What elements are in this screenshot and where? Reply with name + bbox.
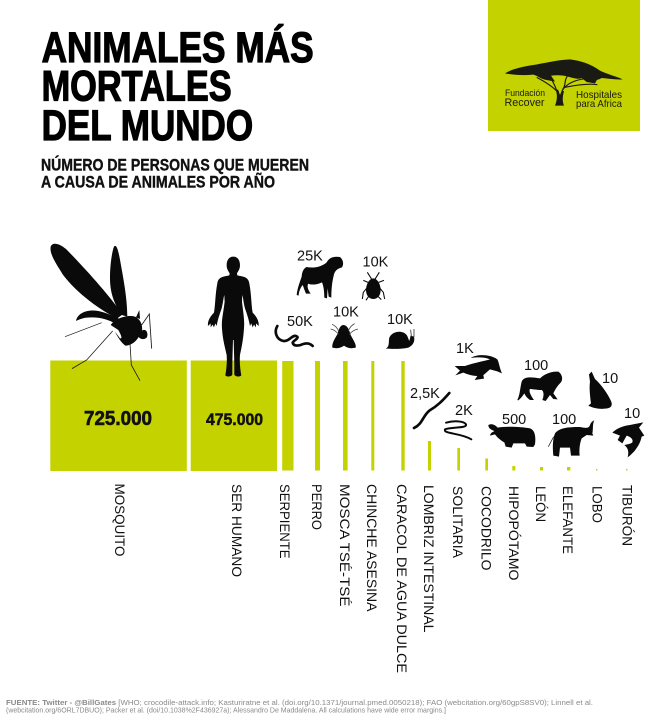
icon: snake [276, 326, 313, 346]
source footnote: FUENTE: Twitter - @BillGates [WHO; crocodile-attack.info; Kasturiratne et al. (doi.org/10.1371/journal.pmed.0050218); FAO (webcitation.org/60gpS8SV0); Linnell et al. [6, 699, 593, 707]
bar: mosquito [50, 360, 187, 471]
subtitle: NÚMERO DE PERSONAS QUE MUEREN [41, 156, 309, 174]
title: MORTALES [42, 63, 232, 111]
bar: chinche [371, 361, 374, 470]
category labels: HIPOPÓTAMO [506, 486, 521, 580]
icon: dog [297, 257, 343, 298]
icon: shark [612, 422, 644, 457]
icon: hippo [488, 424, 535, 448]
title: ANIMALES MÁS [42, 24, 314, 72]
category labels [112, 484, 635, 673]
category labels: COCODRILO [479, 486, 494, 570]
value labels: 100 [524, 358, 548, 374]
bar: lobo [596, 469, 598, 470]
icon: human silhouette [208, 257, 259, 376]
title: DEL MUNDO [42, 102, 253, 150]
value labels: 25K [297, 248, 323, 264]
logo text left: Recover [504, 97, 545, 109]
category labels: MOSQUITO [112, 484, 127, 556]
bar: tiburón [626, 469, 628, 470]
icon: mosquito [51, 244, 152, 381]
icon: acacia tree [505, 59, 623, 106]
category labels: LOBO [590, 486, 605, 523]
value labels: 2K [455, 403, 473, 419]
icon: crocodile [455, 355, 502, 380]
value labels: 50K [287, 314, 313, 330]
category labels: TIBURÓN [620, 485, 635, 546]
category labels: CHINCHE ASESINA [364, 484, 379, 612]
bar: elefante [567, 467, 570, 470]
value labels: 10 [624, 406, 640, 422]
icon: tapeworm [445, 421, 471, 439]
value labels: 10K [333, 304, 359, 320]
category labels: SOLITARIA [450, 486, 465, 558]
bar: hipopótamo [512, 466, 515, 470]
value: 725.000: 725.000 [84, 408, 152, 430]
bar chart [50, 360, 628, 471]
logo text right: para Africa [576, 99, 622, 110]
value labels: 1K [456, 341, 474, 357]
bar: perro [315, 361, 320, 470]
title [42, 24, 314, 150]
bar: león [540, 467, 543, 470]
bar: caracol [401, 361, 405, 470]
bar: serpiente [282, 361, 294, 470]
subtitle: A CAUSA DE ANIMALES POR AÑO [41, 172, 275, 192]
icon: elephant [548, 420, 594, 457]
bar: mosca [343, 361, 348, 470]
logo text right: Hospitales [576, 90, 622, 101]
logo text left [504, 88, 545, 109]
category labels: CARACOL DE AGUA DULCE [394, 484, 409, 673]
category labels: LEÓN [533, 486, 548, 522]
category labels: LOMBRIZ INTESTINAL [421, 485, 436, 632]
category labels: PERRO [309, 484, 324, 530]
source footnote: (webcitation.org/6ORL7DBUO); Packer et al. (doi/10.1038%2F436927a); Alessandro De Maddalena. All calculations have wide error margins.] [6, 706, 446, 714]
bar: cocodrilo [485, 458, 488, 470]
icon: roundworm [414, 393, 449, 428]
bar: lombriz [428, 441, 431, 470]
category labels: SER HUMANO [229, 484, 244, 577]
logo text left: Fundación [505, 88, 545, 98]
icon: lion [517, 372, 562, 401]
source footnote [6, 699, 593, 714]
bar: solitaria [457, 448, 460, 470]
logo text right [576, 90, 622, 110]
value labels: 500 [502, 412, 526, 428]
category labels: MOSCA TSÉ-TSÉ [337, 484, 352, 607]
category labels: ELEFANTE [560, 486, 575, 554]
value labels: 10 [602, 371, 618, 387]
icon: kissing bug [362, 272, 385, 300]
icon: snail [386, 329, 414, 349]
category labels: SERPIENTE [277, 484, 292, 559]
icon: howling wolf [588, 372, 612, 409]
subtitle [41, 156, 309, 192]
panel: logo Fundación Recover [488, 0, 640, 131]
value labels: 10K [387, 312, 413, 328]
value labels: 10K [362, 254, 389, 270]
bar: ser humano [191, 360, 277, 471]
icon: tsetse fly [331, 324, 358, 348]
value labels [287, 248, 640, 428]
value labels: 2,5K [410, 386, 440, 402]
value labels: 100 [552, 412, 576, 428]
value: 475.000: 475.000 [206, 410, 263, 429]
